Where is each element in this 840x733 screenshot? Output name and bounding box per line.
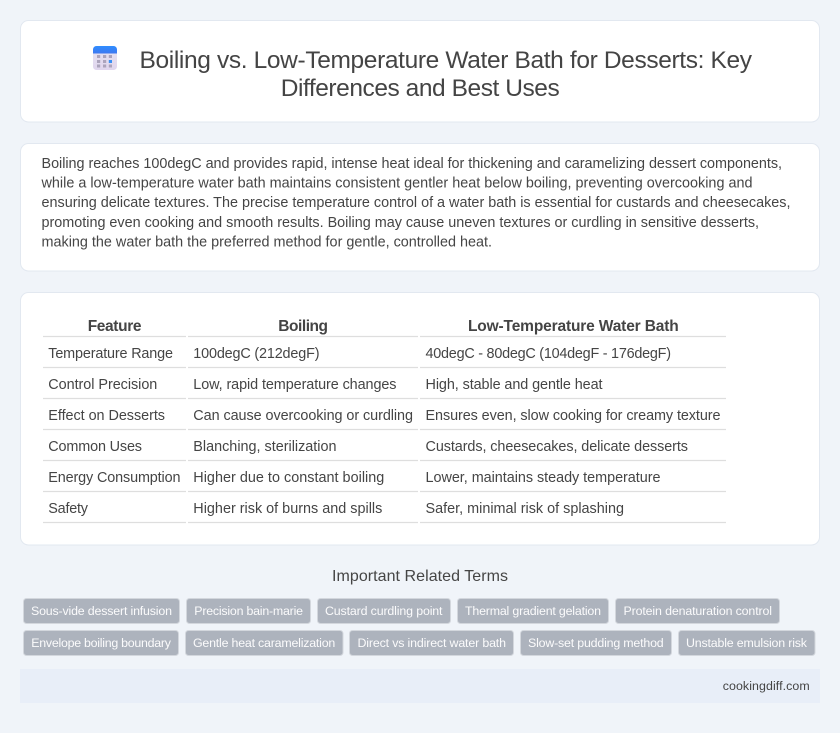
text block: description paragraph: promoting even cooking and smooth results. Boiling may cause uneven textures or curdling in sensitive desserts,: [42, 215, 759, 231]
panel: comparison table: [20, 292, 820, 545]
table header row: Low-Temperature Water Bath: [468, 318, 679, 335]
tag: Sous-vide dessert infusion: [24, 598, 180, 624]
title: [140, 47, 753, 102]
row: safety: Safer, minimal risk of splashing: [426, 501, 624, 517]
text block: description paragraph: ensuring delicate textures. The precise temperature control of a water bath is essential for custards and cheesecakes,: [42, 195, 790, 211]
tag: Direct vs indirect water bath: [350, 630, 514, 656]
tag: Precision bain-marie: Precision bain-marie: [194, 604, 303, 618]
tag: Envelope boiling boundary: [24, 630, 178, 656]
tag: Slow-set pudding method: [520, 630, 672, 656]
row: control precision: High, stable and gentle heat: [426, 377, 602, 393]
row: common uses: Custards, cheesecakes, delicate desserts: [426, 439, 688, 455]
footer: cookingdiff.com: [723, 679, 810, 693]
row: temperature range: Temperature Range: [48, 346, 173, 362]
row: safety: Safety: [48, 501, 89, 517]
title: Differences and Best Uses: [281, 75, 560, 102]
title: Boiling vs. Low-Temperature Water Bath for Desserts: Key: [140, 47, 753, 74]
tag: Thermal gradient gelation: [458, 598, 608, 624]
panel: related term tags: [24, 598, 815, 656]
row: effect on desserts: Can cause overcooking or curdling: [193, 408, 413, 424]
row: effect on desserts: Ensures even, slow cooking for creamy texture: [426, 408, 720, 424]
row: effect on desserts: Effect on Desserts: [48, 408, 165, 424]
row: temperature range: 100degC (212degF): [193, 346, 320, 362]
tag: Gentle heat caramelization: Gentle heat caramelization: [193, 636, 335, 650]
row: control precision: [48, 377, 603, 393]
text block: description paragraph: [40, 156, 790, 250]
panel: description: [20, 144, 820, 271]
row: common uses: [48, 439, 688, 455]
row: control precision: Control Precision: [48, 377, 157, 393]
heading: related terms: Important Related Terms: [332, 568, 508, 585]
tag: Precision bain-marie: [186, 598, 310, 624]
panel: header: [20, 20, 820, 122]
tag: Unstable emulsion risk: [678, 630, 815, 656]
row: temperature range: 40degC - 80degC (104degF - 176degF): [426, 346, 671, 362]
tag: Envelope boiling boundary: Envelope boiling boundary: [31, 636, 172, 650]
row: temperature range: [48, 346, 671, 362]
table header row: Feature: [88, 318, 142, 335]
row: control precision: Low, rapid temperature changes: [193, 377, 396, 393]
tag: Custard curdling point: [318, 598, 450, 624]
row: effect on desserts: [48, 408, 721, 424]
table rules: [43, 336, 726, 522]
tag: Sous-vide dessert infusion: Sous-vide dessert infusion: [31, 604, 172, 618]
row: safety: Higher risk of burns and spills: [193, 501, 382, 517]
row: energy consumption: Lower, maintains steady temperature: [426, 470, 660, 486]
tag: Thermal gradient gelation: Thermal gradient gelation: [465, 604, 601, 618]
row: common uses: Blanching, sterilization: [193, 439, 336, 455]
tag: Unstable emulsion risk: Unstable emulsion risk: [686, 636, 808, 650]
table header row: Boiling: [278, 318, 328, 335]
tag: Gentle heat caramelization: [186, 630, 343, 656]
text block: description paragraph: while a low-temperature water bath maintains consistent gentler heat below boiling, preventing overcooking and: [40, 176, 752, 192]
tag: Direct vs indirect water bath: Direct vs indirect water bath: [358, 636, 506, 650]
footer: [20, 669, 820, 703]
icon: calendar: [93, 46, 117, 70]
row: energy consumption: Higher due to constant boiling: [193, 470, 384, 486]
row: energy consumption: [48, 470, 661, 486]
text block: description paragraph: Boiling reaches 100degC and provides rapid, intense heat ideal for thickening and caramelizing dessert components,: [42, 156, 782, 172]
tag: Protein denaturation control: [616, 598, 780, 624]
tag: Slow-set pudding method: Slow-set pudding method: [528, 636, 664, 650]
row: energy consumption: Energy Consumption: [48, 470, 180, 486]
tag: Custard curdling point: Custard curdling point: [325, 604, 443, 618]
table header row: [88, 318, 679, 335]
row: common uses: Common Uses: [48, 439, 142, 455]
tag: Protein denaturation control: Protein denaturation control: [624, 604, 772, 618]
row: safety: [48, 501, 624, 517]
text block: description paragraph: making the water bath the preferred method for gentle, controlled heat.: [42, 234, 492, 250]
